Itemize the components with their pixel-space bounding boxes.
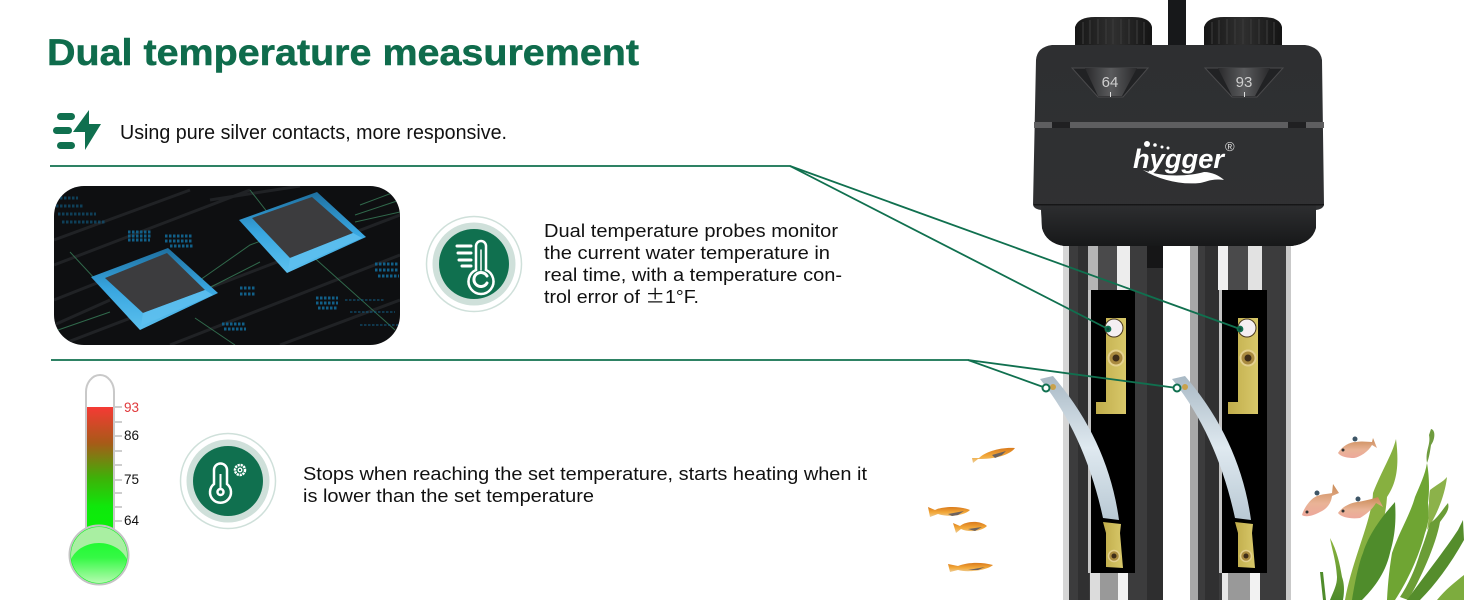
callout lines: bimetal strips [51, 360, 1180, 392]
text: dual probes description: the current water temperature in [544, 242, 830, 263]
label: 75: 75 [124, 472, 139, 487]
label: 86: 86 [124, 428, 139, 443]
display: 93 [1205, 68, 1283, 97]
display: 64 [1072, 68, 1148, 97]
icon: thermometer with gear badge [180, 434, 276, 528]
callout lines: silver contacts [50, 166, 1242, 332]
logo: hygger: ® [1225, 139, 1235, 154]
icon: thermometer badge [426, 216, 522, 312]
head body [1033, 45, 1324, 246]
chip: right [239, 192, 366, 273]
text: stop and start heating [303, 463, 867, 506]
sensor strip: left [1040, 376, 1123, 568]
label: 64: 64 [124, 513, 140, 528]
tubes [1063, 240, 1291, 600]
knob: left [1075, 17, 1152, 46]
text: stop and start heating: Stops when reaching the set temperature, starts heating when it [303, 463, 867, 484]
label: 93: 93 [124, 400, 139, 415]
right tube [1190, 240, 1291, 600]
text: dual probes description: trol error of ±1°F. [544, 283, 699, 309]
logo: hygger [1133, 139, 1235, 183]
knob: right [1204, 17, 1282, 46]
black panel: left [1091, 290, 1135, 573]
black panel: right [1222, 290, 1267, 573]
chip: left [91, 248, 218, 330]
contact: right gold plate [1228, 318, 1258, 414]
text: dual probes description: real time, with a temperature con- [544, 264, 842, 285]
plant: green aquatic leaves [1320, 429, 1464, 600]
fish: orange school [928, 448, 1015, 572]
text: dual probes description: Dual temperature probes monitor [544, 220, 838, 241]
sensor strip: right [1172, 376, 1255, 568]
product: heater [1033, 0, 1324, 600]
cable [1168, 0, 1186, 46]
text: dual probes description [544, 220, 842, 309]
fish: red tetras [1302, 436, 1383, 518]
icon: lightning bolt with speed bars [53, 110, 101, 150]
contact: left gold plate [1096, 318, 1126, 414]
display: 64: 64 [1102, 74, 1118, 91]
display: 93: 93 [1236, 74, 1252, 91]
left tube [1063, 240, 1163, 600]
thermometer gauge [70, 375, 140, 584]
logo: hygger: hygger [1133, 144, 1225, 174]
title: Dual temperature measurement [47, 32, 639, 73]
text: stop and start heating: is lower than the set temperature [303, 485, 594, 506]
text: silver contacts: Using pure silver contacts, more responsive. [120, 122, 507, 144]
panel: circuit board chips photo [54, 186, 400, 345]
